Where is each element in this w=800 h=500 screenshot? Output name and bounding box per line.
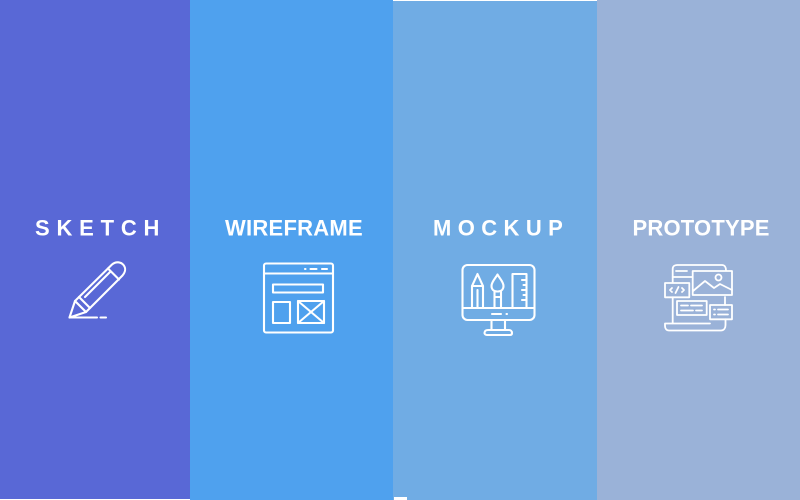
panel: mockup [393,1,597,500]
panel: prototype [597,0,800,500]
heading: sketch: SKETCH [35,216,166,240]
icon: pencil [70,262,125,318]
heading: prototype: PROTOTYPE [632,216,770,240]
icon: browser wireframe [264,264,333,332]
icon: prototype screens [665,265,732,330]
panel: wireframe [190,0,393,500]
icon: monitor with design tools [462,265,534,335]
panel: sketch [0,0,190,499]
heading: mockup: MOCKUP [433,216,569,240]
heading: wireframe: WIREFRAME [225,216,363,240]
